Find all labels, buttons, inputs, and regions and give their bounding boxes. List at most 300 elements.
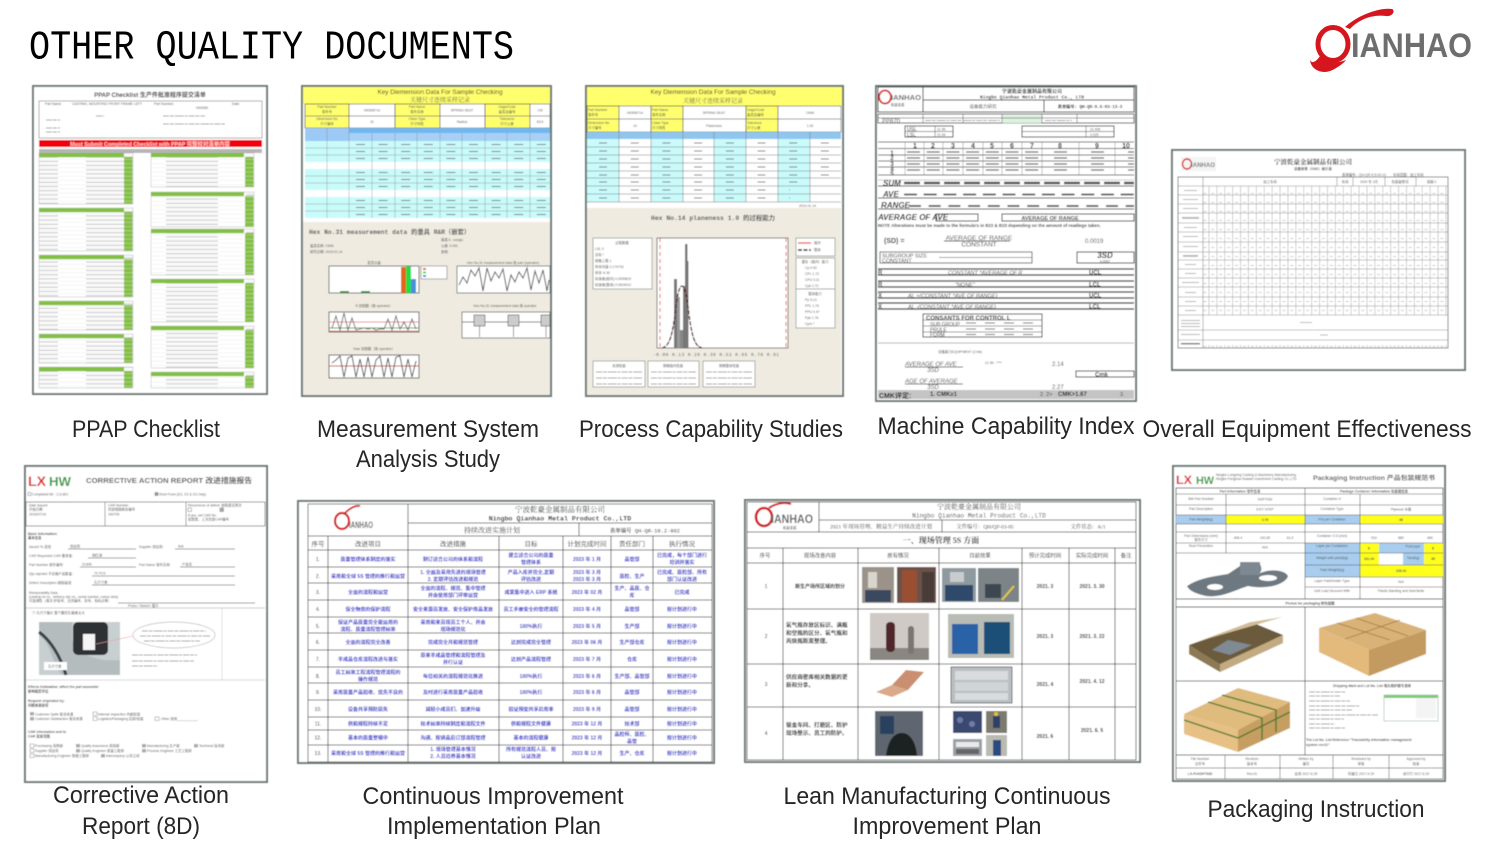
part and container information tables: 6 <box>1368 546 1370 550</box>
caption: Lean Manufacturing Continuous Improvement Plan <box>784 783 1110 840</box>
table rows: 按计划进行中 <box>667 673 697 680</box>
measurement grid: 3 <box>951 143 955 150</box>
limits boxes: LSL <box>907 132 916 138</box>
part row: PP870 <box>882 119 901 125</box>
table rows: 已完成，每个部门进行 <box>657 552 707 559</box>
table rows: 全面的流程、规范、集中管理 <box>420 585 486 592</box>
company logo: 乾豪金属 <box>783 525 797 530</box>
measurement grid: 3 <box>890 162 894 168</box>
row 1: production area division: 2021. 3. 30 <box>1079 584 1105 590</box>
company marks and heading <box>1176 473 1435 487</box>
process data box: 规格上限 1 <box>595 258 612 263</box>
basic information form: Qty rejected 不合格产品数量: <box>29 571 73 576</box>
potential and overall capability boxes: Cp 0.92 <box>805 266 817 270</box>
equipment capability calculation: 3SD <box>927 368 940 374</box>
part and container information tables: 406.4 <box>1234 536 1242 540</box>
issue information box: If yes, old CAR No. <box>188 514 217 518</box>
column headers: 原有情况 <box>887 552 909 560</box>
part and container information tables: 8 <box>1432 546 1434 550</box>
statistic rows: NOTE Alterations must be made to the formula's in B22 & B23 depending on the amount of readings taken. <box>878 223 1101 228</box>
limits boxes: USL <box>907 127 917 133</box>
table rows: 2023 年 9 月 <box>573 706 601 713</box>
part information rows: Tolerance <box>500 117 514 121</box>
OEE table: 包装量情况 <box>1392 179 1409 184</box>
table rows: 部门认证改进 <box>667 576 697 583</box>
table rows: 2023 年 1 月 <box>573 556 601 563</box>
potential and overall capability boxes: Ppk 1.76 <box>805 316 818 320</box>
photos: workers and signage <box>875 711 1007 756</box>
photos heading bar <box>1176 599 1443 607</box>
table rows: 9. <box>316 690 320 696</box>
part and container information tables: Total Weight(kg) <box>1320 568 1344 572</box>
packaging frames <box>1176 607 1443 755</box>
panel: corrective action report document <box>25 466 267 782</box>
CAR information section: CAR 发放范围 <box>28 734 50 738</box>
part information rows: Class Type <box>409 117 425 121</box>
SD and control limit rows: R <box>878 270 883 276</box>
table rows: 按计划进行中 <box>667 689 697 696</box>
effects and request sections: Logistics/Packaging 后勤/包装 <box>98 716 144 721</box>
table rows: 并由使用部门评审运营 <box>428 592 478 599</box>
part and container information tables: Unit Load Secured With <box>1314 589 1350 593</box>
control chart: Xbar: Xbar 控制图（按 operator） <box>353 346 395 351</box>
part and container information tables: Pcs per Container <box>1318 518 1346 522</box>
constants table: SUB GROUP <box>930 322 961 328</box>
sign-off footer: 编写 <box>1303 761 1310 766</box>
part and container information tables: Plastic Banding and Seal Belts <box>1378 589 1424 593</box>
part and container information tables: 460 <box>1427 536 1433 540</box>
CMK footer: 2. 2> <box>1040 392 1052 398</box>
checklist: left column sections <box>39 153 133 388</box>
table rows: 达到完成完全管理 <box>511 639 551 646</box>
panel: PPAP checklist document <box>33 86 267 394</box>
document heading: 设备能力研究 <box>970 103 997 110</box>
process data box: LSL 0 <box>595 247 604 251</box>
statistic rows <box>877 179 1134 228</box>
capability analysis area <box>587 208 841 395</box>
part and container information tables: 61.9 <box>1287 536 1293 540</box>
caption: Overall Equipment Effectiveness: Overall Equipment Effectiveness <box>1142 416 1472 443</box>
panel: packaging instruction document <box>1173 466 1445 781</box>
column headers: 改进项目 <box>355 539 381 548</box>
CAR information section: Interompany 公司之间 <box>106 753 140 758</box>
part information box: Part Name <box>45 102 61 106</box>
histogram with fitted curve: -0.00 0.13 0.26 0.39 0.52 0.65 0.78 0.91 <box>653 352 779 358</box>
shipping mark and lot number list: The Lot No. List Reference "Traceability information management <box>1306 738 1412 742</box>
part and container information tables: Layer per Containers <box>1316 544 1348 548</box>
part and container information tables: BW Part Number <box>1188 497 1215 501</box>
part information rows: 尺寸特性 <box>652 125 666 130</box>
basic information form: 产品名 <box>182 562 192 566</box>
issue information box: Recurrence of defect: 缺陷是否再次 <box>188 502 242 508</box>
part and container information tables: Container O.D.(mm) <box>1317 534 1347 538</box>
box plots by operator <box>462 303 550 338</box>
issue information box: 开始日期 <box>29 506 43 512</box>
line chart: by part <box>457 260 550 293</box>
caption: Machine Capability Index: Machine Capability Index <box>878 413 1134 440</box>
gauge R&R chart area: Hex No.31 measurement data 的量具 R&R（嵌套） <box>309 227 470 236</box>
column headers: 目标 <box>524 539 538 548</box>
issue information box: Date Issued: <box>29 504 48 508</box>
part and container information tables: Container # <box>1323 497 1341 501</box>
part information rows: HS506714 <box>627 111 643 115</box>
heading: 车间范围：加工车间 <box>1393 172 1424 177</box>
measurement grid: 8 <box>1058 143 1062 150</box>
table rows: 2023 年 3 月 <box>573 569 601 576</box>
part information rows: CMM <box>806 111 814 115</box>
data table: 2014.01.14 <box>799 204 816 208</box>
table rows: 生产部、品管部 <box>614 673 650 680</box>
SD and control limit rows: X <box>878 294 882 300</box>
issue information box: 如是是，上次改进CAR编号 <box>188 516 230 522</box>
CMK footer: 1. CMK≥1 <box>930 392 958 398</box>
constants table: FORM <box>930 332 945 338</box>
row 2: gas cylinder storage <box>765 613 1105 660</box>
part information rows: 尺寸编号 <box>588 125 602 130</box>
potential and overall capability boxes: Cpk 1.72 <box>805 284 819 288</box>
table rows: 4. <box>316 607 320 613</box>
column headers: 实际完成时间 <box>1076 552 1108 560</box>
effects and request sections: Internal Inspection 内部检验 <box>98 712 141 716</box>
table rows: 品管部 <box>624 706 640 713</box>
part information rows: Planeness <box>706 124 722 128</box>
document heading: 文件编号：QH/QP-03-05 <box>956 522 1014 530</box>
part and container information tables: N/A <box>1262 546 1269 550</box>
report type checkboxes: Short Form (D1, D2 & D3 Only) <box>159 492 206 496</box>
report heading: CORRECTIVE ACTION REPORT 改进措施报告 <box>86 476 252 485</box>
table rows: 流程、质量流程管理标准 <box>340 626 396 633</box>
SD and control limit rows: R <box>878 282 883 288</box>
SD and control limit rows: UCL <box>1089 294 1102 300</box>
part information rows: 量具及编号 <box>747 112 765 117</box>
table rows: 11. <box>315 722 321 728</box>
part information rows: 63.6 <box>537 120 543 124</box>
row 4: workshop safety: 2021. 6. 5 <box>1081 728 1103 734</box>
heading: 表单编号：QH-QR-9.5-03-13 <box>1342 172 1386 177</box>
sign-off footer: Revision <box>1245 757 1259 761</box>
table rows: 培训并落实 <box>669 559 695 566</box>
part and container information tables: Part Information 零件信息 <box>1220 488 1261 494</box>
part and container information tables: 226.44 <box>1396 569 1406 573</box>
part row <box>878 114 1134 125</box>
part information rows: Part Name <box>652 108 668 112</box>
gauge R&R chart area: 其他: <box>441 249 449 254</box>
OEE table: 车间 <box>1342 179 1349 184</box>
table rows: 2023 年 6 月 <box>573 673 601 680</box>
table rows: 采用和来员现员工个人、并由 <box>420 619 486 626</box>
part and container information tables: Container Type <box>1321 507 1344 511</box>
part information rows: Gage/Code <box>498 105 516 109</box>
column headers: 序号 <box>312 539 325 548</box>
column headers <box>312 539 696 548</box>
part information rows <box>305 104 550 128</box>
table rows: 13. <box>315 751 321 757</box>
part and container information tables: 48 <box>1399 518 1403 522</box>
table rows: 供和规程文件健康 <box>511 720 551 728</box>
caption: Corrective Action Report (8D) <box>53 782 229 840</box>
document heading: 宁波乾豪金属制品有限公司 <box>937 502 1021 511</box>
table rows: 员工手册安全的管理流程 <box>503 606 559 613</box>
table rows: 100%执行 <box>520 673 542 680</box>
company logo cell: IANHAO <box>891 93 921 102</box>
table rows: 100%执行 <box>520 623 542 630</box>
part information box <box>39 101 262 138</box>
part and container information tables: 880 <box>1398 536 1404 540</box>
table rows: 制订适合公司的体系和流程 <box>423 556 483 563</box>
company marks <box>28 473 72 489</box>
row 2: gas cylinder storage: 丙炔瓶距离整理。 <box>786 637 831 645</box>
sign-off footer <box>1176 755 1443 779</box>
part information rows: 尺寸公差 <box>500 121 514 126</box>
sign-off footer: 何道元 2017.6.29 <box>1348 771 1374 776</box>
table rows: 2. <box>316 574 320 580</box>
row 2: gas cylinder storage: 2 <box>765 634 768 640</box>
part information rows: 零件名称 <box>652 112 666 117</box>
chart legend: 组内 <box>814 240 821 245</box>
chart legend: 整体 <box>814 247 821 252</box>
table rows: 采用和全球 5S 管理的推行和运营 <box>331 750 405 757</box>
panel: process capability study document <box>586 86 843 396</box>
CAR information section: CAR information and to <box>28 730 66 734</box>
OEE table <box>1178 177 1448 348</box>
table rows: 全面的流程完全改善 <box>345 639 391 646</box>
company logo cell: 乾豪金属 <box>891 102 905 107</box>
document heading <box>464 504 680 534</box>
panel: lean manufacturing improvement plan document <box>745 500 1140 762</box>
chart legend <box>796 238 835 256</box>
shipping mark and lot number list <box>1306 683 1438 747</box>
SD and control limit rows: AVERAGE OF RANGE <box>946 235 1013 242</box>
part information rows: 零件号 <box>588 112 599 117</box>
part information rows: HS506714 <box>364 108 380 112</box>
control chart: R: R 控制图（按 operator） <box>355 303 393 308</box>
document heading <box>830 502 1106 545</box>
panel: machine capability index document <box>876 86 1136 401</box>
CMK footer: CMK评定: <box>879 391 911 400</box>
potential and overall capability boxes: 潜在（组内）能力 <box>801 259 829 264</box>
table rows: 2023 年 3 月 <box>573 576 601 583</box>
part information rows: 尺寸编号 <box>320 121 334 126</box>
table rows: 按计划进行中 <box>667 656 697 663</box>
row 1: production area division <box>765 567 1105 603</box>
basic information form: 基本信息 <box>28 535 42 540</box>
SD and control limit rows: 0.0057 <box>1100 260 1110 264</box>
measurement grid: 1 <box>890 151 894 157</box>
table rows: 5. <box>316 624 320 630</box>
SD and control limit rows: (SD) = <box>884 238 904 245</box>
document heading: Ningbo Qianhao Metal Product Co.,LTD <box>912 512 1046 520</box>
yellow heading: Key Diemension Data For Sample Checking <box>377 89 503 96</box>
process data box: 样本均值 0.174733 <box>595 264 624 269</box>
heading <box>1274 157 1424 177</box>
table rows: 生产、品质、仓 <box>614 585 650 592</box>
panel: overall equipment effectiveness document <box>1172 150 1465 370</box>
effects and request sections: Customer Satisfaction 客诉来源 <box>35 716 83 721</box>
title: OTHER QUALITY DOCUMENTS <box>29 26 514 72</box>
issue information box: 改进措施报告编号 <box>108 506 136 512</box>
table rows: 产品入库并完全,定期 <box>508 569 554 576</box>
row 3: supplier sharing: 2021. 4 <box>1037 682 1054 688</box>
document heading: 表单编号: QH-QR-9.5-03-13-3 <box>1058 103 1123 110</box>
potential and overall capability boxes <box>796 258 835 328</box>
part information rows: 零件号 <box>322 109 333 114</box>
table rows: 2. 定期评估改进和规范 <box>428 576 478 583</box>
company marks: HW <box>49 474 72 489</box>
table rows: 按计划进行中 <box>667 606 697 613</box>
bar chart: variance components: 变异分量 <box>367 260 381 265</box>
panel: continuous improvement implementation plan document <box>298 501 714 763</box>
row 3: supplier sharing <box>765 667 1105 703</box>
part information rows: SPRING SEAT <box>451 108 473 112</box>
process data box: 标准差(整体) 0.0524012 <box>595 282 631 287</box>
photos: before and after <box>862 567 1019 603</box>
basic information form: Part Name 零件名称: <box>139 562 171 567</box>
row 2: gas cylinder storage: 和空瓶的区分、氧气瓶和 <box>786 629 848 637</box>
potential and overall capability boxes: PPU 4.47 <box>805 310 820 314</box>
row 3: supplier sharing: 3 <box>765 682 768 688</box>
box plots by operator: Hex No.31 measurement data 按 operator <box>473 303 537 308</box>
basic information form: 70 PCS <box>94 572 106 576</box>
table rows: 技术标准持续制度和流程文件 <box>420 720 486 728</box>
equipment capability calculation: AGE OF AVERAGE <box>904 379 959 385</box>
caption: Continuous Improvement Implementation Plan: Implementation Plan <box>387 813 601 840</box>
caption: Packaging Instruction: Packaging Instruction <box>1208 796 1424 823</box>
statistic rows: AVE <box>882 190 900 199</box>
table frame and grid <box>308 504 712 762</box>
table rows: 2023 年 02 月 <box>572 589 602 596</box>
basic information form: Part Number 零件编号: <box>29 562 64 567</box>
basic information form <box>28 532 255 608</box>
part information rows: Part Name <box>409 105 425 109</box>
CMK footer: CMK>1.67 <box>1058 392 1088 398</box>
part and container information tables: Layer Pad/Divider Type <box>1314 579 1350 583</box>
constants table: PRULE <box>930 328 947 334</box>
document heading: 宁波乾豪金属制品有限公司 <box>515 504 605 514</box>
CAR information section: Quality Engineer 质量工程师 <box>81 748 125 753</box>
defect callout <box>96 622 215 666</box>
statistic rows: AVERAGE OF AVE <box>877 213 949 222</box>
document heading: 2021 年现场管理、精益生产持续改进计划 <box>830 522 932 530</box>
illustration: strapped crate <box>1184 688 1290 752</box>
potential and overall capability boxes: CPU 0.11 <box>805 278 820 282</box>
table rows: 1. 现场管理基本情况 <box>430 746 476 753</box>
photos: cylinders before and after <box>870 613 1014 660</box>
company logo cell <box>879 90 921 107</box>
company logo <box>335 506 373 531</box>
document heading: PPAP Checklist 生产件批准程序提交清单 <box>94 91 206 99</box>
equipment capability calculation: 2.14 <box>1052 362 1064 368</box>
part information rows: 1.00 <box>807 124 813 128</box>
document heading: 持续改进实施计划 <box>464 526 520 534</box>
equipment capability calculation: 21.96 - **** <box>985 361 1002 365</box>
table rows: 供和规程持续不足 <box>348 720 388 728</box>
part information rows: CM <box>537 108 543 112</box>
statistic rows: AVERAGE OF RANGE <box>1021 216 1079 222</box>
table rows: 2023 年 12 月 <box>572 720 602 728</box>
table rows: 现场规范化 <box>440 626 466 633</box>
data table <box>305 128 550 218</box>
company logo <box>1181 157 1216 171</box>
statistic rows: RANGE <box>881 201 911 210</box>
equipment capability calculation: 设备能力EQUIPMENT (Cmk) <box>938 349 982 354</box>
potential and overall capability boxes: PPL 1.76 <box>805 304 819 308</box>
table rows: 沟通、按讲品后订部流程管理 <box>420 734 486 742</box>
table rows: 管理体系 <box>521 559 541 566</box>
CAR information section: Purchasing 采购部 <box>35 743 64 748</box>
observed and expected performance boxes <box>593 361 755 387</box>
table rows: 1. <box>316 557 320 563</box>
measurement grid: 9 <box>1095 143 1099 150</box>
document heading <box>970 88 1123 110</box>
issue information box: CAR Number: <box>108 504 129 508</box>
measurement grid: 5 <box>990 143 994 150</box>
table rows: 2. 人员培养基本情况 <box>430 753 476 760</box>
SD and control limit rows: CONSTANT *AVERAGE OF R <box>948 270 1022 276</box>
column headers: 改进措施 <box>440 539 466 548</box>
defect photo <box>39 622 120 675</box>
row 4: workshop safety: 2021. 6 <box>1037 734 1054 740</box>
caption: Lean Manufacturing Continuous Improvement Plan: Lean Manufacturing Continuous <box>784 783 1110 810</box>
equipment capability calculation: 3SD <box>927 385 940 391</box>
document heading: Ningbo Qianhao Metal Product Co., LTD <box>980 94 1084 100</box>
measurement grid: 4 <box>890 167 894 173</box>
report type checkboxes <box>28 492 206 496</box>
part information rows <box>587 106 841 132</box>
table rows: 12. <box>315 736 321 742</box>
basic information form: 可追溯性（周次 炉批号、交货编号、序号、色码点等） <box>29 598 111 603</box>
part information rows: Part Number <box>588 108 608 112</box>
OEE table: 填报人 <box>1427 179 1438 184</box>
yellow heading <box>587 87 842 106</box>
shipping mark and lot number list: Shipping Mark and Lot No. List 唛头和护题号清单 <box>1333 683 1412 688</box>
measurement grid: 10 <box>1122 143 1130 150</box>
part and container information tables: Part Weight(kg) <box>1189 518 1213 522</box>
caption: Continuous Improvement Implementation Plan: Continuous Improvement <box>362 783 624 810</box>
SD and control limit rows: AL +(CONSTANT *AVE OF RANGE) <box>907 294 998 300</box>
table rows: 按计划进行中 <box>667 639 697 646</box>
part and container information tables: KDP7030 <box>1258 498 1272 502</box>
table rows: 减轻小成员们、加速升级 <box>425 706 481 713</box>
illustration: open box with parts <box>1189 617 1283 672</box>
table rows: 8. <box>316 674 320 680</box>
table rows: 生产部 <box>624 623 640 630</box>
panel: measurement system analysis document <box>302 86 551 396</box>
equipment capability calculation: AVERAGE OF AVE <box>904 362 958 368</box>
column headers: 计划完成时间 <box>568 539 606 548</box>
basic information form: CAR Requestor CAR 要求者: <box>29 553 73 558</box>
measurement grid: 6 <box>1010 143 1014 150</box>
sign-off footer: 余行行 2017.6.29 <box>1403 771 1429 776</box>
row 2: gas cylinder storage: 氧气瓶存放区标识、满瓶 <box>786 621 848 629</box>
row 1: production area division: 1 <box>765 584 768 590</box>
caption: Corrective Action Report (8D): Report (8D) <box>82 813 200 840</box>
constants table: CONSANTS FOR CONTROL L <box>926 316 1011 322</box>
caption: Measurement System Analysis Study: Analysis Study <box>356 446 500 473</box>
part and container information tables: Part Description <box>1189 507 1213 511</box>
table rows: 2023 年 6 月 <box>573 689 601 696</box>
part and container information tables: EXIT STEP <box>1256 508 1274 512</box>
table rows: 2023 年 4 月 <box>573 606 601 613</box>
issue information box: 2015/07/16 <box>29 512 46 516</box>
table rows: 仓库 <box>627 656 637 663</box>
column headers: 备注 <box>1121 552 1132 560</box>
OEE table: 加工车间 <box>1263 179 1277 184</box>
table rows: 完成完全月和规范管理 <box>428 639 478 646</box>
table rows: 基本的质量整顿中 <box>348 734 388 742</box>
observed and expected performance boxes: 预期整体性能 <box>719 363 740 368</box>
part and container information tables: 192.65 <box>1260 536 1270 540</box>
checklist: right column sections <box>151 153 254 388</box>
